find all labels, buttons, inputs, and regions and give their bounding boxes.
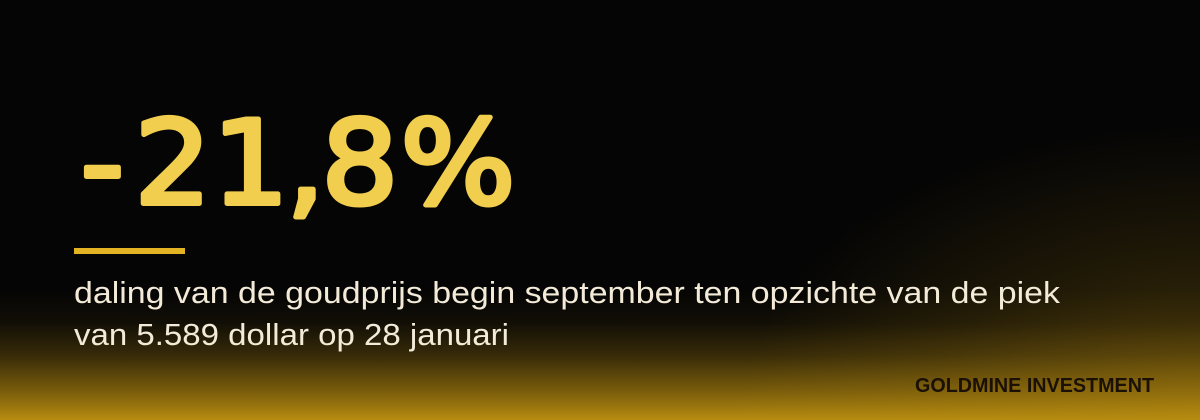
- source label: GOLDMINE INVESTMENT: [915, 375, 1154, 397]
- description text: van 5.589 dollar op 28 januari: [74, 317, 509, 352]
- description text: [74, 275, 1061, 352]
- headline figure: -21,8%: [81, 96, 515, 231]
- description text: daling van de goudprijs begin september ten opzichte van de piek: [74, 275, 1061, 310]
- accent rule: [74, 248, 185, 254]
